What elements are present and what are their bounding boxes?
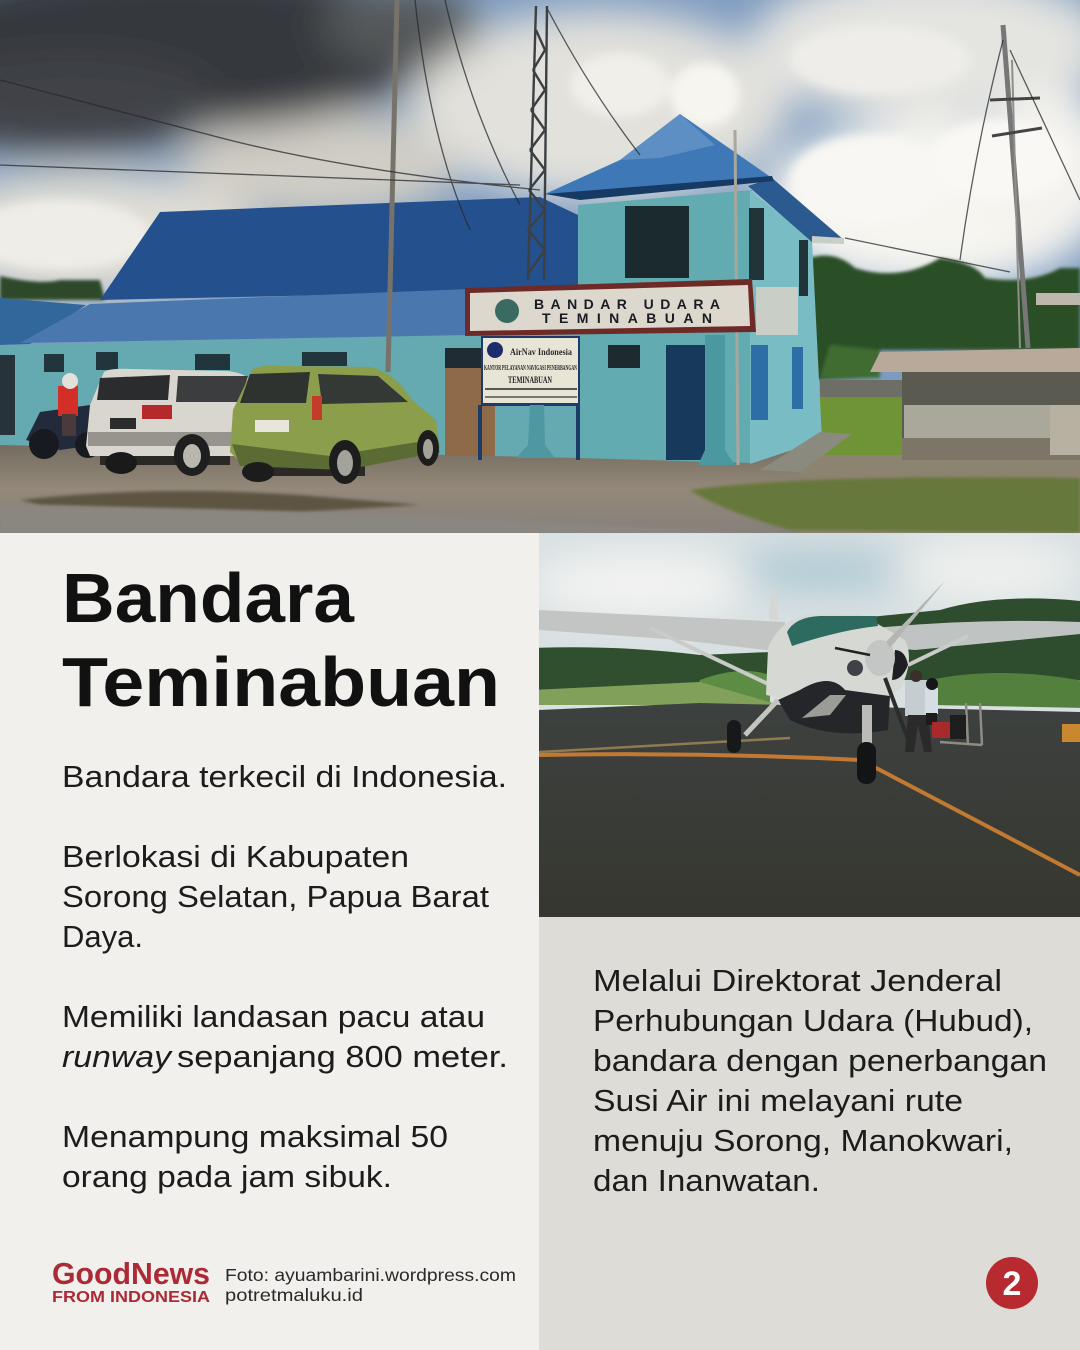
- poles and tower: [0, 0, 1080, 465]
- photo: Teminabuan airport building: [0, 0, 1080, 533]
- fact: location: Sorong Selatan, Papua Barat: [62, 879, 489, 914]
- title: [62, 559, 500, 721]
- text block: routes: [593, 963, 1047, 1198]
- ground: [0, 445, 820, 533]
- text block: routes: dan Inanwatan.: [593, 1163, 820, 1198]
- text block: left facts: [62, 759, 508, 1194]
- main dark roof: [100, 197, 578, 300]
- two-storey block: [578, 190, 752, 463]
- tree line: [530, 598, 1080, 708]
- text block: routes: Melalui Direktorat Jenderal: [593, 963, 1002, 998]
- AirNav sign: AirNav Indonesia: [510, 347, 572, 357]
- text block: routes: menuju Sorong, Manokwari,: [593, 1123, 1013, 1158]
- ground crew: [905, 670, 1080, 752]
- tarmac: [539, 703, 1080, 917]
- title: Teminabuan: [62, 643, 500, 721]
- white car: [86, 369, 252, 476]
- logo: GoodNews from Indonesia: [52, 1256, 210, 1306]
- AirNav sign: [481, 336, 580, 406]
- main sign: TEMINABUAN: [542, 310, 712, 326]
- fact: capacity: orang pada jam sibuk.: [62, 1159, 392, 1194]
- text block: routes: Perhubungan Udara (Hubud),: [593, 1003, 1033, 1038]
- main sign: BANDAR UDARA: [534, 296, 720, 312]
- photo credits: potretmaluku.id: [225, 1285, 363, 1305]
- panel: left background: [0, 533, 539, 1350]
- plane: [539, 581, 1080, 784]
- fact: runway: Memiliki landasan pacu atau: [62, 999, 485, 1034]
- fact: runway: [62, 999, 508, 1074]
- text block: routes: Susi Air ini melayani rute: [593, 1083, 963, 1118]
- upper roof: [545, 114, 772, 197]
- AirNav sign: TEMINABUAN: [508, 375, 552, 385]
- landing gear: [745, 700, 778, 735]
- photo: Susi Air plane on the apron: [530, 533, 1080, 917]
- text block: routes: bandara dengan penerbangan: [593, 1043, 1047, 1078]
- photo credits: [225, 1265, 516, 1305]
- AirNav sign: KANTOR PELAYANAN NAVIGASI PENERBANGAN: [484, 364, 577, 372]
- far-left roof: [0, 298, 86, 345]
- panel: right background: [539, 917, 1080, 1350]
- shelter: [870, 348, 1080, 372]
- logo: GoodNews from Indonesia: FROM INDONESIA: [52, 1289, 210, 1306]
- main sign: [465, 279, 756, 336]
- fact: capacity: [62, 1119, 448, 1194]
- fact: smallest airport: Bandara terkecil di Indonesia.: [62, 759, 507, 794]
- lower roof: [20, 289, 470, 343]
- fact: capacity: Menampung maksimal 50: [62, 1119, 448, 1154]
- page number badge: [986, 1257, 1038, 1309]
- motorcycle rider: [26, 373, 101, 459]
- fact: location: [62, 839, 489, 954]
- tail: [769, 590, 779, 620]
- fact: location: Daya.: [62, 919, 143, 954]
- fact: runway: runway: [62, 1039, 174, 1074]
- fact: location: Berlokasi di Kabupaten: [62, 839, 409, 874]
- propeller: [886, 581, 945, 648]
- fuselage: [766, 614, 909, 698]
- page number badge: 2: [1003, 1265, 1021, 1303]
- photo credits: Foto: ayuambarini.wordpress.com: [225, 1265, 516, 1285]
- wings: [539, 610, 785, 652]
- logo: GoodNews from Indonesia: GoodNews: [52, 1256, 210, 1291]
- green car: [230, 366, 440, 484]
- title: Bandara: [62, 559, 355, 637]
- lower wall: [0, 332, 580, 458]
- trees: [0, 256, 1080, 380]
- fact: runway: sepanjang 800 meter.: [177, 1039, 508, 1074]
